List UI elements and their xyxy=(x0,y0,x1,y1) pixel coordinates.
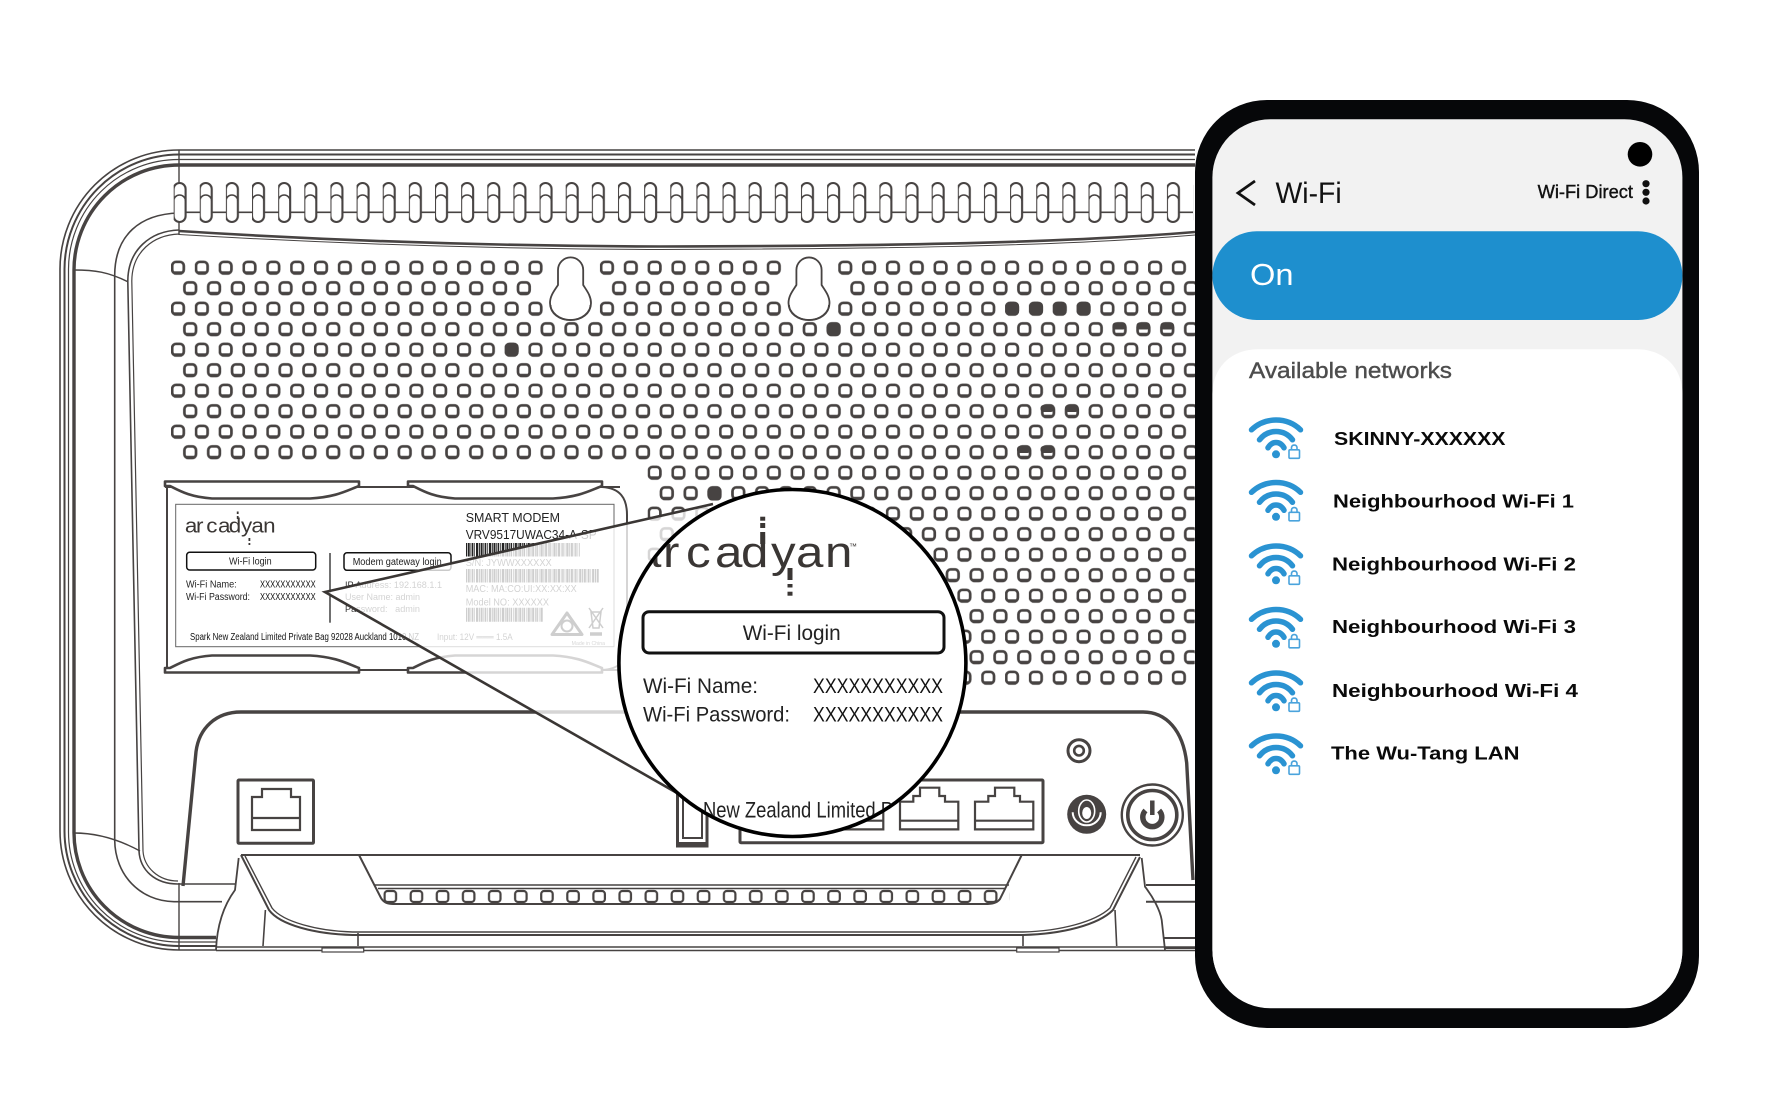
on toggle bar xyxy=(1212,231,1682,320)
magnified Wi-Fi login box xyxy=(643,612,944,653)
available networks heading: Available networks xyxy=(1249,358,1452,383)
overflow menu xyxy=(1642,180,1650,205)
modem gateway login section: Modem gateway login xyxy=(353,557,442,568)
model and serial info: S/N: JYWWXXXXXX xyxy=(466,557,552,569)
network: SKINNY: SKINNY-XXXXXX xyxy=(1334,428,1506,449)
phone line port xyxy=(238,780,314,843)
label footer text: Made in China xyxy=(572,641,605,647)
network: The Wu-Tang LAN xyxy=(1252,736,1520,774)
Wi-Fi login section: Wi-Fi login xyxy=(229,556,272,568)
network: Neighbourhood 2 xyxy=(1252,546,1576,584)
network: Neighbourhood 2: Neighbourhood Wi-Fi 2 xyxy=(1332,554,1576,575)
compliance marks xyxy=(552,608,603,634)
router rear view illustration xyxy=(60,150,1197,952)
magnified Wi-Fi credentials: XXXXXXXXXXX xyxy=(813,703,943,727)
screen title: Wi-Fi xyxy=(1276,177,1342,210)
networks panel xyxy=(1212,349,1682,1008)
perforated ventilation holes xyxy=(169,258,1197,688)
on toggle bar: On xyxy=(1250,257,1294,292)
phone body xyxy=(1195,100,1699,1028)
model and serial info xyxy=(466,510,599,615)
indicator ring xyxy=(1068,740,1090,762)
magnified Wi-Fi credentials xyxy=(643,678,942,722)
magnified Wi-Fi credentials: Wi-Fi Name: xyxy=(643,674,758,698)
Wi-Fi Direct link: Wi-Fi Direct xyxy=(1538,182,1633,202)
port bay xyxy=(183,712,1193,886)
modem gateway login section: User Name: admin xyxy=(345,592,420,603)
label footer text xyxy=(190,632,605,647)
smartphone xyxy=(1195,100,1699,1028)
small arcadyan logo xyxy=(185,512,276,545)
Wi-Fi login section: Wi-Fi Password: xyxy=(186,592,250,603)
router outer casing xyxy=(60,150,1195,950)
magnified arcadyan logo: ™ xyxy=(849,542,857,551)
magnified Wi-Fi credentials: Wi-Fi Password: xyxy=(643,703,790,727)
Wi-Fi login section: XXXXXXXXXXX xyxy=(260,592,316,603)
label recess outline xyxy=(165,484,627,670)
magnifier circle xyxy=(619,490,966,836)
magnified Wi-Fi credentials: XXXXXXXXXXX xyxy=(813,674,943,698)
magnified arcadyan logo: arcadyan xyxy=(634,527,852,576)
USB port xyxy=(678,793,707,846)
phone screen xyxy=(1212,119,1682,1008)
lower vent xyxy=(359,855,1022,904)
network: The Wu-Tang LAN: The Wu-Tang LAN xyxy=(1331,742,1520,763)
network: Neighbourhood 3 xyxy=(1252,610,1576,648)
power jack xyxy=(1067,795,1106,834)
label divider xyxy=(329,553,331,623)
network: Neighbourhood 4 xyxy=(1252,673,1579,711)
network: Neighbourhood 1 xyxy=(1252,483,1574,521)
label clips xyxy=(165,482,359,498)
printed product label xyxy=(165,482,627,672)
back chevron xyxy=(1238,181,1255,205)
model and serial info: Model NO: XXXXXX xyxy=(466,597,549,609)
camera xyxy=(1628,142,1652,167)
small arcadyan logo: arcadyan xyxy=(185,516,276,537)
label footer text: Input: 12V ═══ 1.5A xyxy=(437,632,513,643)
ethernet ports xyxy=(740,780,1043,843)
magnified arcadyan logo xyxy=(634,517,857,596)
modem gateway login section xyxy=(344,553,451,615)
model and serial info: SMART MODEM xyxy=(466,510,560,525)
model and serial info: MAC: MA:CO:UI:XX:XX:XX xyxy=(466,583,577,595)
magnified footer text: New Zealand Limited P xyxy=(703,797,893,822)
network: SKINNY xyxy=(1252,420,1506,458)
modem gateway login section: Password: admin xyxy=(345,604,420,615)
label footer text: Spark New Zealand Limited Private Bag 92028 Auckland 1010 NZ xyxy=(190,632,419,643)
modem gateway login section: IP Address: 192.168.1.1 xyxy=(345,580,442,591)
power button xyxy=(1122,784,1183,846)
top vent slots xyxy=(174,180,1193,225)
network: Neighbourhood 4: Neighbourhood Wi-Fi 4 xyxy=(1332,680,1579,701)
model and serial info: VRV9517UWAC34-A-SP xyxy=(466,527,597,542)
Wi-Fi login section: XXXXXXXXXXX xyxy=(260,579,316,590)
Wi-Fi login section xyxy=(186,552,316,603)
keyhole mounts xyxy=(550,257,830,320)
router stand xyxy=(216,855,1195,952)
Wi-Fi login section: Wi-Fi Name: xyxy=(186,579,237,590)
network: Neighbourhood 3: Neighbourhood Wi-Fi 3 xyxy=(1332,616,1576,637)
callout cone from label to magnifier xyxy=(325,504,713,793)
magnified Wi-Fi login box: Wi-Fi login xyxy=(743,621,841,645)
network: Neighbourhood 1: Neighbourhood Wi-Fi 1 xyxy=(1333,490,1574,512)
